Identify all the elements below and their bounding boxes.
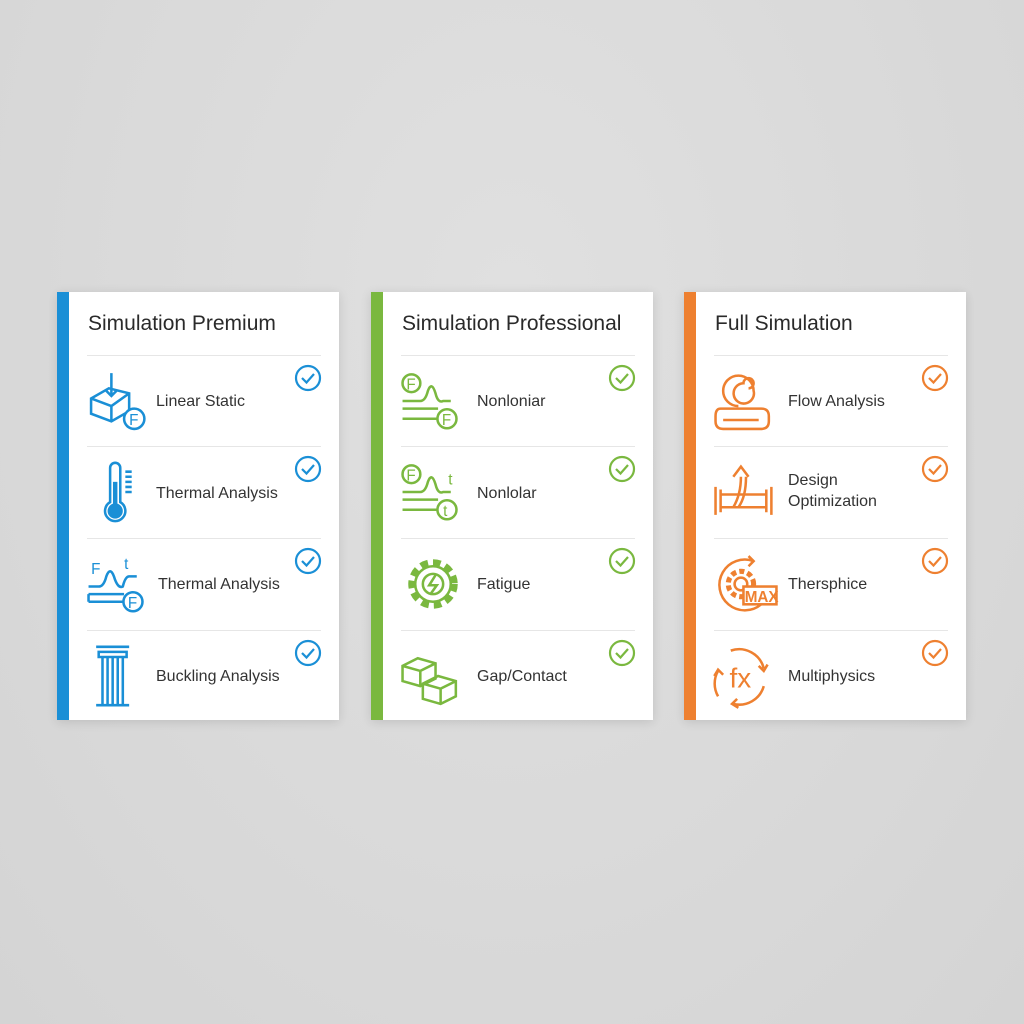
label: Multiphysics xyxy=(788,668,875,685)
icon: pipe arrow xyxy=(714,464,773,515)
icon: swirl pipe xyxy=(714,374,770,430)
icon: check xyxy=(922,456,948,482)
row: Buckling Analysis xyxy=(96,640,322,706)
icon: thermometer xyxy=(104,462,132,522)
label: Thermal Analysis xyxy=(158,576,280,593)
row: Nonloniar xyxy=(401,364,636,430)
card: Simulation Premium xyxy=(57,292,339,720)
row: Thermal Analysis 2 xyxy=(87,548,322,612)
label: Optimization xyxy=(788,493,877,510)
icon: blocks xyxy=(401,656,458,706)
row: Multiphysics xyxy=(713,640,948,709)
icon: check xyxy=(294,456,322,482)
icon: check xyxy=(608,548,636,574)
icon: force curve: t xyxy=(124,556,129,573)
icon: nonlinear F xyxy=(401,373,458,430)
icon: nonlinear t: t xyxy=(443,503,448,520)
row: Linear Static xyxy=(90,364,322,430)
row: Flow Analysis xyxy=(714,364,948,430)
icon: gear max xyxy=(718,555,779,612)
icon: force curve: F xyxy=(128,595,137,612)
icon: check xyxy=(922,548,948,574)
icon: gear max: MAX xyxy=(745,589,779,606)
icon: check xyxy=(608,640,636,666)
row: Fatigue xyxy=(408,548,636,609)
icon: check xyxy=(294,640,322,666)
label: Linear Static xyxy=(156,393,245,410)
icon: nonlinear F: F xyxy=(442,412,451,429)
label: Buckling Analysis xyxy=(156,668,280,685)
label: Design xyxy=(788,472,838,489)
label xyxy=(788,472,877,510)
card: Full Simulation xyxy=(684,292,966,720)
heading: Full Simulation: Full Simulation xyxy=(715,312,853,335)
icon: nonlinear t xyxy=(401,464,458,520)
icon: column xyxy=(96,646,130,706)
label: Thermal Analysis xyxy=(156,485,278,502)
icon: nonlinear t: t xyxy=(448,471,453,488)
row: Thersphice xyxy=(718,548,948,612)
icon: gear xyxy=(408,559,458,609)
icon: check xyxy=(922,364,948,392)
row: Gap/Contact xyxy=(401,640,636,706)
label: Fatigue xyxy=(477,576,530,593)
label: Thersphice xyxy=(788,576,867,593)
icon: box with force: F xyxy=(129,412,138,429)
icon: check xyxy=(922,640,948,666)
icon: nonlinear t: F xyxy=(406,468,416,485)
heading: Simulation Professional: Simulation Professional xyxy=(402,312,621,335)
row: Thermal Analysis xyxy=(104,456,322,522)
icon: check xyxy=(294,548,322,574)
icon: check xyxy=(608,364,636,392)
row: Nonlolar xyxy=(401,456,636,520)
icon: check xyxy=(608,456,636,482)
icon: force curve: F xyxy=(91,561,100,578)
icon: fx cycle xyxy=(713,648,769,709)
label: Nonloniar xyxy=(477,393,545,410)
row: Design Optimization xyxy=(714,456,948,515)
label: Flow Analysis xyxy=(788,393,885,410)
icon: nonlinear F: F xyxy=(406,377,416,394)
label: Gap/Contact xyxy=(477,668,567,685)
icon: check xyxy=(294,364,322,392)
icon: fx cycle: fx xyxy=(730,662,751,693)
heading: Simulation Premium: Simulation Premium xyxy=(88,312,276,335)
label: Nonlolar xyxy=(477,485,537,502)
card: Simulation Professional xyxy=(371,292,653,720)
icon: force curve xyxy=(87,556,144,612)
icon: box with force xyxy=(90,373,146,430)
